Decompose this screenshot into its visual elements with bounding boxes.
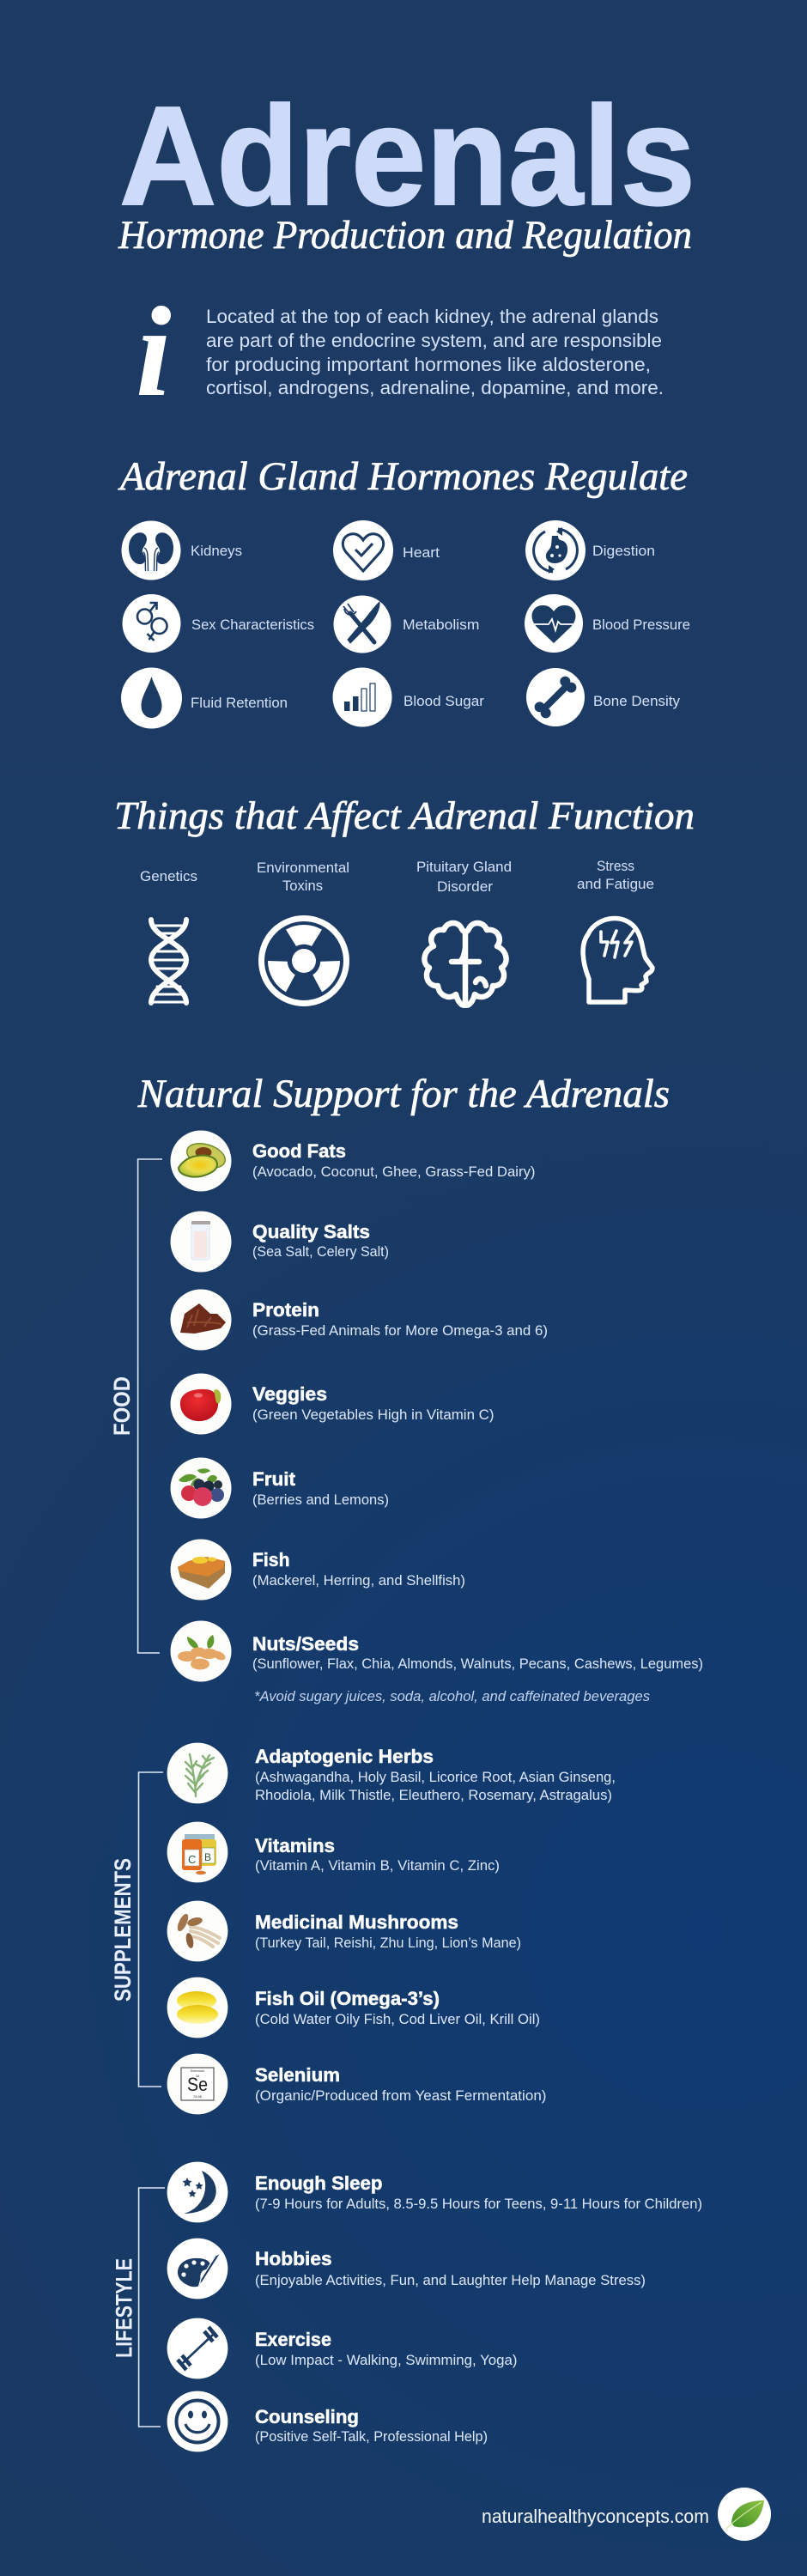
icon: fluid retention bbox=[121, 668, 182, 728]
item: nuts and seeds bbox=[252, 1633, 703, 1672]
intro text: Located at the top of each kidney, the adrenal glands bbox=[206, 306, 658, 327]
icon: vitamin bottles bbox=[167, 1822, 228, 1882]
bracket: supplements bbox=[139, 1772, 163, 2087]
icon: italic i: i bbox=[136, 281, 172, 423]
item: fish: Fish bbox=[252, 1549, 290, 1571]
item: good fats bbox=[252, 1140, 536, 1180]
panel: supplements bbox=[110, 1743, 616, 2114]
icon: salt jar bbox=[170, 1211, 232, 1273]
item: vitamins: Vitamins bbox=[255, 1835, 335, 1856]
icon: digestion bbox=[525, 520, 586, 580]
item: exercise bbox=[255, 2329, 517, 2368]
item: good fats: Good Fats bbox=[252, 1140, 346, 1162]
item: fish oil: (Cold Water Oily Fish, Cod Liver Oil, Krill Oil) bbox=[255, 2011, 540, 2027]
title: Adrenals bbox=[119, 77, 695, 234]
category label: supplements: SUPPLEMENTS bbox=[110, 1858, 136, 2002]
heading: affect: Things that Affect Adrenal Function bbox=[114, 793, 695, 837]
icon: leaf logo bbox=[718, 2488, 771, 2541]
item: enough sleep: Enough Sleep bbox=[255, 2172, 383, 2194]
item: vitamins: (Vitamin A, Vitamin B, Vitamin C, Zinc) bbox=[255, 1857, 500, 1874]
item: vitamins bbox=[255, 1835, 500, 1874]
icon: stressed head bbox=[583, 918, 652, 1002]
label: stress and fatigue bbox=[577, 858, 654, 892]
icon: bone density bbox=[526, 668, 585, 726]
label: blood sugar: Blood Sugar bbox=[404, 693, 484, 709]
icon: nuts and seeds bbox=[170, 1621, 232, 1681]
label: stress and fatigue: Stress bbox=[597, 858, 634, 874]
item: counseling: Counseling bbox=[255, 2406, 359, 2427]
label: sex characteristics: Sex Characteristics bbox=[191, 617, 314, 633]
label: blood pressure: Blood Pressure bbox=[592, 617, 690, 633]
item: exercise: Exercise bbox=[255, 2329, 331, 2350]
icon: moon bbox=[167, 2162, 228, 2222]
icon: vitamin bottles: C bbox=[188, 1853, 196, 1866]
label: heart: Heart bbox=[403, 544, 440, 561]
item: quality salts: Quality Salts bbox=[252, 1221, 370, 1242]
category label: food: FOOD bbox=[109, 1376, 135, 1436]
bracket: lifestyle bbox=[139, 2188, 165, 2427]
intro text: are part of the endocrine system, and are responsible bbox=[206, 330, 662, 351]
label: digestion: Digestion bbox=[592, 543, 655, 559]
item: quality salts: (Sea Salt, Celery Salt) bbox=[252, 1243, 389, 1260]
intro text: cortisol, androgens, adrenaline, dopamine, and more. bbox=[206, 377, 664, 398]
icon: metabolism bbox=[333, 596, 391, 653]
label: environmental toxins bbox=[257, 860, 349, 894]
icon: berries bbox=[170, 1458, 232, 1518]
item: enough sleep bbox=[255, 2172, 702, 2212]
heading: regulate: Adrenal Gland Hormones Regulate bbox=[118, 454, 688, 499]
subtitle: Hormone Production and Regulation bbox=[118, 213, 692, 258]
icon: palette bbox=[167, 2239, 228, 2299]
item: fruit: (Berries and Lemons) bbox=[252, 1492, 389, 1508]
category label: lifestyle: LIFESTYLE bbox=[112, 2258, 137, 2358]
item: protein: (Grass-Fed Animals for More Omega-3 and 6) bbox=[252, 1322, 548, 1339]
label: pituitary gland disorder bbox=[416, 859, 512, 895]
panel: things that affect function bbox=[140, 858, 654, 1005]
label: metabolism: Metabolism bbox=[403, 617, 479, 633]
label: environmental toxins: Environmental bbox=[257, 860, 349, 876]
heading: natural support: Natural Support for the Adrenals bbox=[137, 1072, 670, 1116]
icon: heart bbox=[333, 520, 393, 580]
icon: selenium tile: 34 bbox=[196, 2074, 200, 2078]
item: fish oil bbox=[255, 1988, 540, 2027]
label: kidneys: Kidneys bbox=[191, 543, 242, 559]
label: pituitary gland disorder: Disorder bbox=[437, 878, 493, 895]
intro panel bbox=[136, 281, 664, 423]
item: veggies: (Green Vegetables High in Vitamin C) bbox=[252, 1406, 495, 1423]
item: fish oil: Fish Oil (Omega-3’s) bbox=[255, 1988, 440, 2009]
icon: blood pressure bbox=[525, 594, 583, 653]
label: bone density: Bone Density bbox=[593, 693, 680, 709]
item: protein: Protein bbox=[252, 1299, 319, 1321]
icon: dna bbox=[151, 920, 186, 1003]
item: fruit bbox=[252, 1468, 389, 1508]
item: quality salts bbox=[252, 1221, 389, 1260]
item: nuts and seeds: (Sunflower, Flax, Chia, Almonds, Walnuts, Pecans, Cashews, Legumes) bbox=[252, 1656, 703, 1672]
icon: avocado bbox=[170, 1130, 232, 1192]
bracket: food bbox=[138, 1159, 162, 1653]
icon: fish fillet bbox=[170, 1539, 232, 1601]
item: hobbies: Hobbies bbox=[255, 2248, 332, 2269]
panel: hormones regulate grid bbox=[121, 520, 690, 728]
icon: sex characteristics bbox=[122, 594, 180, 653]
item: hobbies: (Enjoyable Activities, Fun, and Laughter Help Manage Stress) bbox=[255, 2272, 646, 2288]
item: selenium bbox=[255, 2064, 546, 2104]
icon: blood sugar bbox=[333, 668, 391, 726]
item: hobbies bbox=[255, 2248, 646, 2288]
panel: lifestyle bbox=[112, 2162, 702, 2451]
icon: radiation bbox=[261, 919, 347, 1003]
item: good fats: (Avocado, Coconut, Ghee, Grass-Fed Dairy) bbox=[252, 1163, 536, 1180]
item: selenium: Selenium bbox=[255, 2064, 340, 2086]
item: adaptogenic herbs: Rhodiola, Milk Thistle, Eleuthero, Rosemary, Astragalus) bbox=[255, 1787, 612, 1803]
icon: selenium tile: 78.96 bbox=[193, 2094, 203, 2099]
label: environmental toxins: Toxins bbox=[282, 878, 323, 894]
item: counseling bbox=[255, 2406, 488, 2445]
item: medicinal mushrooms: (Turkey Tail, Reishi, Zhu Ling, Lion’s Mane) bbox=[255, 1935, 521, 1951]
item: protein bbox=[252, 1299, 548, 1339]
intro text: for producing important hormones like aldosterone, bbox=[206, 354, 651, 375]
item: fruit: Fruit bbox=[252, 1468, 296, 1490]
icon: fish oil capsules bbox=[167, 1978, 228, 2038]
item: fish bbox=[252, 1549, 465, 1589]
label: genetics: Genetics bbox=[140, 868, 197, 884]
note: avoid beverages: *Avoid sugary juices, soda, alcohol, and caffeinated beverages bbox=[254, 1688, 650, 1704]
icon: selenium tile: Selenium bbox=[191, 2069, 205, 2073]
icon: herbs bbox=[167, 1743, 228, 1803]
label: pituitary gland disorder: Pituitary Gland bbox=[416, 859, 512, 875]
footer website: naturalhealthyconcepts.com bbox=[482, 2506, 709, 2527]
item: adaptogenic herbs: (Ashwagandha, Holy Basil, Licorice Root, Asian Ginseng, bbox=[255, 1769, 616, 1785]
item: veggies: Veggies bbox=[252, 1383, 327, 1405]
icon: steak bbox=[170, 1290, 232, 1350]
item: selenium: (Organic/Produced from Yeast Fermentation) bbox=[255, 2087, 546, 2104]
panel: food bbox=[109, 1130, 703, 1704]
label: stress and fatigue: and Fatigue bbox=[577, 876, 654, 892]
item: fish: (Mackerel, Herring, and Shellfish) bbox=[252, 1572, 465, 1589]
icon: selenium tile bbox=[167, 2054, 228, 2114]
icon: dumbbell bbox=[167, 2318, 228, 2379]
item: nuts and seeds: Nuts/Seeds bbox=[252, 1633, 359, 1655]
item: exercise: (Low Impact - Walking, Swimming, Yoga) bbox=[255, 2352, 517, 2368]
item: veggies bbox=[252, 1383, 495, 1423]
item: counseling: (Positive Self-Talk, Professional Help) bbox=[255, 2428, 488, 2445]
item: medicinal mushrooms bbox=[255, 1911, 521, 1951]
item: adaptogenic herbs bbox=[255, 1746, 616, 1803]
item: enough sleep: (7-9 Hours for Adults, 8.5-9.5 Hours for Teens, 9-11 Hours for Children) bbox=[255, 2196, 702, 2212]
label: fluid retention: Fluid Retention bbox=[191, 695, 288, 711]
icon: kidneys bbox=[122, 520, 180, 580]
icon: smiley bbox=[167, 2391, 228, 2451]
item: adaptogenic herbs: Adaptogenic Herbs bbox=[255, 1746, 434, 1767]
icon: bell pepper bbox=[170, 1374, 232, 1434]
intro text bbox=[206, 306, 664, 398]
icon: brain bbox=[424, 923, 507, 1005]
item: medicinal mushrooms: Medicinal Mushrooms bbox=[255, 1911, 458, 1933]
icon: vitamin bottles: B bbox=[204, 1851, 211, 1863]
icon: selenium tile: Se bbox=[187, 2074, 208, 2095]
icon: mushrooms bbox=[167, 1901, 228, 1961]
